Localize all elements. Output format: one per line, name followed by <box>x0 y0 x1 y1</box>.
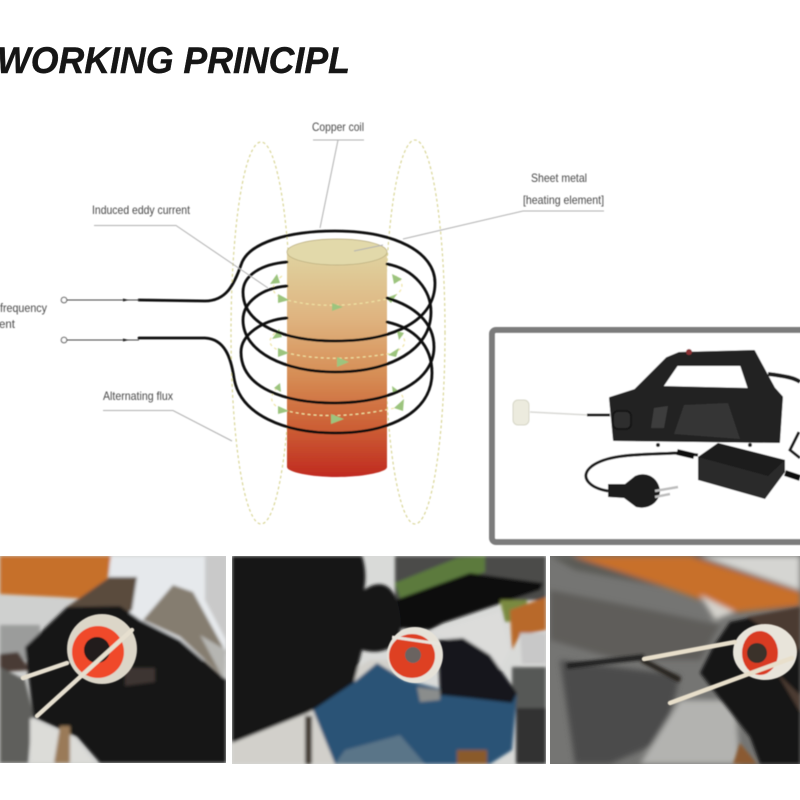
workshop background <box>550 590 720 660</box>
diagram: induction heating principle <box>0 120 604 524</box>
label: high frequency current: frequency <box>0 303 47 315</box>
black vise body <box>25 606 226 763</box>
blue vise <box>313 663 517 764</box>
background wall and orange board <box>110 556 226 660</box>
eddy current arrows <box>270 274 404 424</box>
label: sheet metal: Sheet metal <box>531 171 587 185</box>
right edge cord <box>790 432 800 458</box>
panel frame <box>492 330 800 542</box>
flux loop: left <box>231 142 291 524</box>
heater body <box>610 349 782 447</box>
orange board and wall <box>550 556 800 610</box>
grey foreground <box>0 667 33 763</box>
label: sheet metal: [heating element] <box>523 193 604 207</box>
panel: product kit <box>492 330 800 542</box>
label: high frequency current <box>0 303 47 331</box>
dark vise <box>700 617 800 764</box>
eddy current paths <box>270 276 405 416</box>
copper coil windings <box>139 231 435 433</box>
label: sheet metal <box>354 171 604 251</box>
title: WORKING PRINCIPL <box>0 40 350 81</box>
photo: centre heating a part in a blue vise <box>232 556 546 764</box>
dark operator silhouette <box>232 556 401 743</box>
label: induced eddy current <box>92 203 268 288</box>
glowing coil <box>387 627 443 683</box>
rear cable <box>768 374 800 382</box>
ceramic leads <box>23 630 132 716</box>
glowing coil and leads <box>644 624 797 703</box>
black handles <box>567 657 644 666</box>
heated metal cylinder <box>287 239 387 477</box>
photo: left heating a part in a vise <box>0 556 226 763</box>
label: copper coil: Copper coil <box>312 120 364 134</box>
flux loop: right <box>385 140 445 524</box>
label: copper coil <box>312 120 364 228</box>
vise jaws <box>66 575 139 615</box>
label: induced eddy current: Induced eddy current <box>92 203 191 217</box>
photo: right heating a part with visible leads <box>550 556 800 764</box>
euro plug <box>608 474 678 508</box>
input terminals <box>61 297 139 343</box>
label: alternating flux: Alternating flux <box>103 389 173 403</box>
workshop bench <box>232 660 400 764</box>
label: alternating flux <box>103 389 232 441</box>
power cable <box>586 453 698 491</box>
machine and background <box>395 556 546 600</box>
glowing coil and workpiece <box>23 614 137 716</box>
ceramic coil tip <box>513 400 610 425</box>
power adapter <box>698 443 800 499</box>
